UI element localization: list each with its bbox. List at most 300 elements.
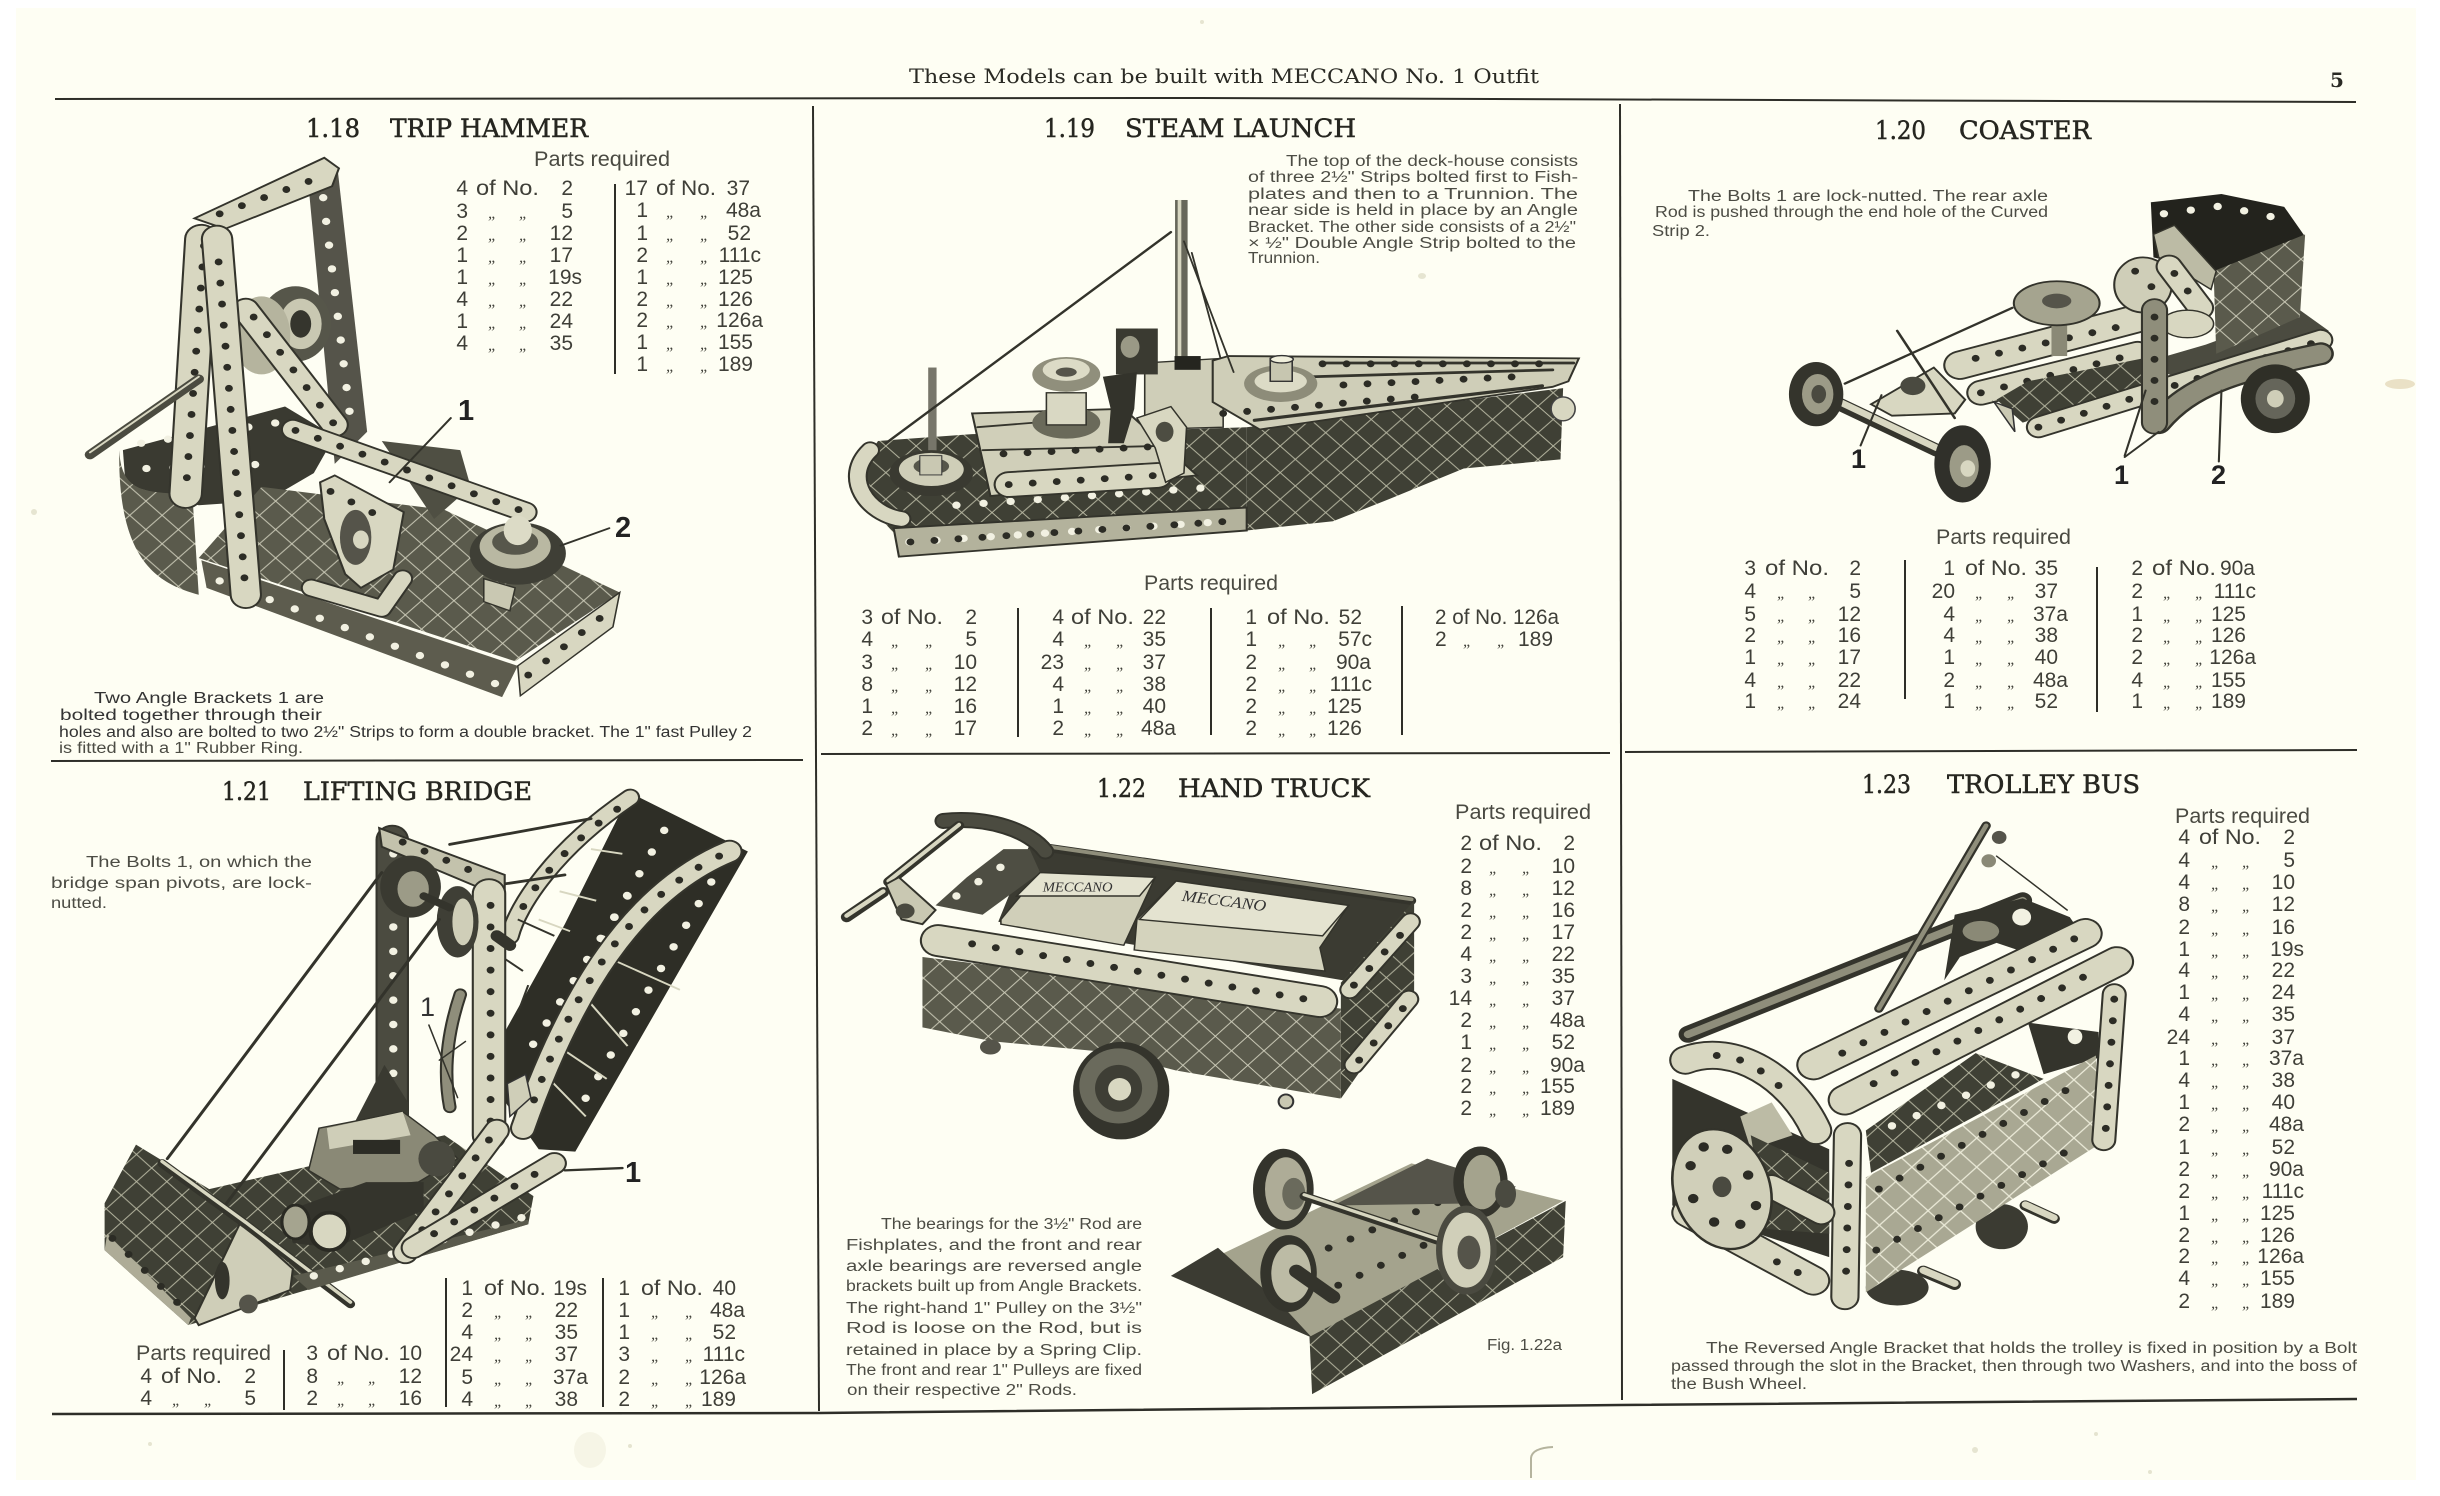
heading: 1.23 Trolley Bus: TROLLEY BUS [1947,770,2140,799]
parts table: 2 [2178,916,2190,939]
parts table: 126a [2209,646,2256,669]
parts table: „„ [1777,651,1817,668]
parts table: 8 [306,1365,318,1388]
parts table: 8 [2178,893,2190,916]
parts table: 5 [1744,603,1756,626]
parts table: 38 [555,1388,578,1411]
parts table: of No. [1965,557,2027,580]
parts table: 189 [1540,1097,1575,1120]
description: plates and then to a Trunnion. The [1248,186,1578,203]
parts table: 22 [2272,959,2295,982]
parts table: 3 [618,1343,630,1366]
parts table: 48a [2033,669,2068,692]
parts table: „„ [337,1370,377,1387]
parts table: 52 [728,222,751,245]
parts table: 17 [550,244,573,267]
description: bridge span pivots, are lock- [51,875,312,892]
parts table: 40 [1143,695,1166,718]
description: The front and rear 1" Pulleys are fixed [846,1362,1142,1379]
parts table: 111c [719,244,761,267]
parts table: 12 [550,222,573,245]
description: × ½" Double Angle Strip bolted to the [1248,235,1576,252]
parts table: 2 [1460,1054,1472,1077]
parts table: 2 [2178,1290,2190,1313]
parts table: of No. [2152,557,2216,580]
parts table: „„ [1777,629,1817,646]
heading: 1.23 Trolley Bus [1862,770,2140,799]
parts table: 4 [140,1365,152,1388]
parts table: 3 [861,606,873,629]
parts table: 24 [550,310,573,333]
heading: 1.21 Lifting Bridge: LIFTING BRIDGE [303,777,532,806]
parts table: 1 [1943,646,1955,669]
parts table: of No. [1479,832,1542,855]
parts table: 2 [636,244,648,267]
parts table: 3 [306,1342,318,1365]
parts table: „„ [488,293,528,310]
parts table: „„ [1489,1014,1531,1031]
parts table: 48a [726,199,761,222]
parts table: 12 [2272,893,2295,916]
parts table: 17 [1552,921,1575,944]
parts table [1449,832,1585,1120]
parts table: „„ [2211,1052,2251,1069]
heading: 1.23 Trolley Bus: 1.23 [1862,770,1911,799]
parts table: 4 [456,177,468,200]
parts heading: Parts required [1936,526,2071,549]
parts table: „„ [494,1393,534,1410]
parts table: 2 [1460,1097,1472,1120]
panel: 1.21 Lifting Bridge [51,777,748,1411]
caption: is fitted with a 1" Rubber Ring. [59,740,303,757]
parts table: 2 [1460,1075,1472,1098]
parts table: 40 [713,1277,736,1300]
parts table: 35 [550,332,573,355]
parts table: 38 [2035,624,2058,647]
parts table [140,1277,746,1411]
caption [1671,1340,2358,1393]
parts table: 1 [618,1321,630,1344]
description: of three 2½" Strips bolted first to Fish- [1248,169,1578,186]
description: Bracket. The other side consists of a 2½" [1248,219,1576,236]
callout numbers: 2 [2211,460,2226,490]
parts table: 16 [2272,916,2295,939]
description: The Bolts 1, on which the [86,854,312,871]
parts table: 2 [2178,1158,2190,1181]
parts table: „„ [1084,656,1125,673]
parts table: of No. [476,177,539,200]
parts table: 1 [636,222,648,245]
parts table: 4 [2178,1267,2190,1290]
parts table: 4 [1943,603,1955,626]
parts table: 24 [450,1343,473,1366]
parts table: 2 [1460,1009,1472,1032]
parts table: 37a [2269,1047,2304,1070]
parts table: 22 [1552,943,1575,966]
description: Rod is loose on the Rod, but is [846,1320,1142,1337]
parts table: 48a [1141,717,1176,740]
parts table: 90a [1336,651,1371,674]
parts table: 2 [2178,1245,2190,1268]
parts table: 2 [461,1299,473,1322]
parts table: „„ [494,1371,534,1388]
parts table: 4 [2178,959,2190,982]
parts table: 1 [2178,981,2190,1004]
parts table: „„ [2211,1207,2251,1224]
parts table: „„ [488,205,528,222]
parts table: „„ [1463,633,1506,650]
parts table: „„ [494,1348,534,1365]
parts table: 189 [1518,628,1553,651]
parts table: 17 [1838,646,1861,669]
parts table: „„ [666,336,709,353]
parts table: „„ [891,722,934,739]
parts table: „„ [2163,629,2204,646]
parts table: „„ [1489,948,1531,965]
panel: 1.18 Trip Hammer [59,114,763,757]
parts table: „„ [2211,1008,2251,1025]
caption [59,690,752,757]
parts table: „„ [1489,860,1531,877]
parts table: 8 [861,673,873,696]
parts table: 2 [2131,557,2143,580]
description: Rod is pushed through the end hole of the Curved [1655,204,2048,221]
parts table: 12 [1552,877,1575,900]
parts table: 4 [2178,849,2190,872]
callout numbers [420,992,641,1189]
parts table: 2 [965,606,977,629]
parts table: 35 [555,1321,578,1344]
callout numbers: 1 [625,1157,641,1189]
parts table: 37 [2272,1026,2295,1049]
heading: 1.20 Coaster: COASTER [1959,116,2092,145]
description: The Bolts 1 are lock-nutted. The rear axle [1688,188,2048,205]
parts table: of No. [641,1277,703,1300]
parts table: 19s [2270,938,2304,961]
parts table: 35 [2272,1003,2295,1026]
parts table: „„ [1489,904,1531,921]
parts table: 22 [1838,669,1861,692]
heading: 1.20 Coaster: 1.20 [1875,116,1926,145]
parts table: „„ [891,656,934,673]
parts table: 2 [618,1366,630,1389]
parts table: 2 [456,222,468,245]
parts table: „„ [2211,1185,2251,1202]
parts table: 5 [561,200,573,223]
parts table: „„ [2163,695,2204,712]
illustration: hand truck model: MECCANO [1042,881,1113,895]
parts table: „„ [1975,629,2016,646]
icon: figure [1103,329,1158,443]
parts table: 52 [1552,1031,1575,1054]
parts table: „„ [1084,700,1125,717]
parts table: „„ [172,1392,213,1409]
parts table: „„ [891,700,934,717]
parts table: „„ [488,271,528,288]
callout numbers: 1 [1851,444,1866,474]
parts table: 4 [861,628,873,651]
parts table: 10 [2272,871,2295,894]
parts table: 1 [636,331,648,354]
parts table: 1 [2131,603,2143,626]
heading: 1.20 Coaster [1875,116,2092,145]
parts table: 5 [2283,849,2295,872]
parts table: „„ [1084,722,1125,739]
heading: 1.22 Hand Truck [1097,774,1371,803]
parts table [1744,557,2256,713]
parts table: „„ [1489,1059,1531,1076]
parts table: 35 [2035,557,2058,580]
parts table: 4 [461,1388,473,1411]
parts table: 2 [1245,717,1257,740]
figure label: Fig. 1.22a [1487,1337,1562,1354]
parts table: 52 [2272,1136,2295,1159]
parts table: 4 [140,1387,152,1410]
illustration: lifting bridge model [105,793,748,1325]
parts table: „„ [1084,633,1125,650]
parts table: 37 [555,1343,578,1366]
parts table: 2 [1245,695,1257,718]
parts table: 8 [1460,877,1472,900]
parts table: 16 [954,695,977,718]
parts table: 3 [456,200,468,223]
parts table: „„ [1975,585,2016,602]
callout numbers: 1 [458,395,474,427]
parts table: „„ [1975,651,2016,668]
parts table: 1 [456,310,468,333]
parts table: 5 [965,628,977,651]
parts table: 1 [2131,690,2143,713]
parts table: 37 [1143,651,1166,674]
parts table: 2 [561,177,573,200]
parts table: 126 [718,288,753,311]
parts table: 111c [1330,673,1372,696]
parts table: 2 [1460,855,1472,878]
parts table: 1 [1744,646,1756,669]
parts table: of No. [484,1277,546,1300]
callout numbers [458,395,631,544]
parts table: 48a [710,1299,745,1322]
page header: These Models can be built with MECCANO No. 1 Outfit [909,64,1539,88]
parts table: „„ [1489,1080,1531,1097]
parts table: 4 [2178,1003,2190,1026]
parts table: 1 [1943,557,1955,580]
heading: 1.22 Hand Truck: HAND TRUCK [1178,774,1371,803]
parts table [2167,826,2304,1313]
parts table: 35 [1552,965,1575,988]
parts table: „„ [666,204,709,221]
parts table: of No. [1267,606,1330,629]
parts table: 90a [2269,1158,2304,1181]
parts table: „„ [2211,921,2251,938]
parts table: „„ [1278,678,1318,695]
parts table: of No. [1071,606,1134,629]
parts table: 125 [2211,603,2246,626]
parts table: 125 [1327,695,1362,718]
parts table: 37 [1552,987,1575,1010]
parts table: 2 [861,717,873,740]
parts table: 24 [1838,690,1861,713]
parts table: 155 [2211,669,2246,692]
parts table: 22 [555,1299,578,1322]
parts table: 37 [2035,580,2058,603]
parts table: 2 [1435,628,1447,651]
parts table: 2 [618,1388,630,1411]
description: Trunnion. [1248,250,1320,267]
parts table: 1 [618,1299,630,1322]
parts table: 4 [461,1321,473,1344]
heading: 1.18 Trip Hammer: TRIP HAMMER [390,114,589,143]
parts table: 52 [1339,606,1362,629]
illustration: steam launch model [849,200,1579,557]
parts table: „„ [1278,633,1318,650]
parts table: 2 [1943,669,1955,692]
parts table: 111c [703,1343,745,1366]
parts table: 4 [1052,673,1064,696]
parts table: 90a [1550,1054,1585,1077]
parts table: „„ [2163,674,2204,691]
description [846,1216,1142,1399]
parts table: 2 [2131,580,2143,603]
parts table: „„ [1975,608,2016,625]
parts table: „„ [2211,1295,2251,1312]
parts table: „„ [651,1348,694,1365]
parts table: „„ [1777,585,1817,602]
parts table: „„ [1975,695,2016,712]
parts table: „„ [2211,1272,2251,1289]
parts table: „„ [488,249,528,266]
parts table: „„ [1489,926,1531,943]
parts table: 1 [2178,1136,2190,1159]
parts table: 12 [1838,603,1861,626]
parts table: 2 [2178,1113,2190,1136]
parts table: 2 [1052,717,1064,740]
parts table: „„ [2163,651,2204,668]
description: Strip 2. [1652,223,1710,240]
parts table: „„ [666,314,709,331]
parts table: 16 [1838,624,1861,647]
parts heading: Parts required [1455,801,1591,824]
description: nutted. [51,895,107,912]
parts table: 52 [713,1321,736,1344]
parts table: of No. [327,1342,390,1365]
parts table: „„ [2211,1118,2251,1135]
parts table: 12 [954,673,977,696]
callout numbers: 1 [420,992,435,1022]
parts table: 1 [2178,938,2190,961]
parts table: 1 [2178,1202,2190,1225]
parts table: „„ [1975,674,2016,691]
parts table: 40 [2272,1091,2295,1114]
parts heading: Parts required [534,148,670,171]
parts table [861,606,1559,740]
parts table: 126a [2257,1245,2304,1268]
callout numbers: 1 [2114,460,2129,490]
parts table: „„ [337,1392,377,1409]
parts table: 1 [636,199,648,222]
parts table: 2 [1849,557,1861,580]
parts table: „„ [666,358,709,375]
parts table: „„ [1489,882,1531,899]
parts table: „„ [488,337,528,354]
parts table: 2 [244,1365,256,1388]
parts table: „„ [891,678,934,695]
parts table: 1 [636,353,648,376]
parts table: „„ [1278,722,1318,739]
parts table: 14 [1449,987,1472,1010]
parts table: 37a [2033,603,2068,626]
description: Fishplates, and the front and rear [846,1237,1142,1254]
description: The bearings for the 3½" Rod are [881,1216,1142,1233]
parts table: 2 [1245,651,1257,674]
parts table: 22 [550,288,573,311]
parts table: 17 [954,717,977,740]
parts table: 1 [618,1277,630,1300]
parts table: 2 [1460,832,1472,855]
parts table: 19s [548,266,582,289]
parts table: „„ [651,1326,694,1343]
parts table: 57c [1338,628,1372,651]
parts table: 1 [1744,690,1756,713]
illustration: trip hammer model [90,158,620,697]
parts table: „„ [1489,1102,1531,1119]
caption: passed through the slot in the Bracket, then through two Washers, and into the boss of [1671,1358,2358,1375]
parts table: 10 [399,1342,422,1365]
parts table: 2 [1563,832,1575,855]
heading: 1.22 Hand Truck: 1.22 [1097,774,1146,803]
parts table: 1 [636,266,648,289]
parts table: 1 [456,266,468,289]
caption: The Reversed Angle Bracket that holds the trolley is fixed in position by a Bolt [1706,1340,2358,1357]
parts table: „„ [1278,656,1318,673]
parts table: „„ [2211,964,2251,981]
parts table: 189 [718,353,753,376]
parts table: „„ [651,1371,694,1388]
parts table: „„ [488,315,528,332]
parts table: 2 [1744,624,1756,647]
parts table: 38 [1143,673,1166,696]
parts table: 4 [1052,628,1064,651]
parts table: „„ [2211,1096,2251,1113]
parts table: 48a [1550,1009,1585,1032]
parts table: 37 [727,177,750,200]
description: axle bearings are reversed angle [846,1258,1142,1275]
parts table: „„ [1489,992,1531,1009]
parts table: 189 [2260,1290,2295,1313]
parts table: 1 [2178,1091,2190,1114]
caption: bolted together through their [60,707,322,724]
parts table: 1 [2178,1047,2190,1070]
description: near side is held in place by an Angle [1248,202,1578,219]
heading: 1.19 Steam Launch: 1.19 [1044,114,1095,143]
parts table: 4 [2178,871,2190,894]
parts table: of No. [881,606,943,629]
callout numbers [1851,444,2226,490]
description [1652,188,2048,240]
parts table: 126 [2211,624,2246,647]
parts table: „„ [2211,1229,2251,1246]
parts table: „„ [488,227,528,244]
parts table: 4 [1943,624,1955,647]
heading: 1.19 Steam Launch: STEAM LAUNCH [1125,114,1356,143]
parts table: „„ [2211,876,2251,893]
parts table: „„ [2211,1031,2251,1048]
parts table: „„ [651,1304,694,1321]
parts table: 2 [2131,646,2143,669]
parts table: 2 [306,1387,318,1410]
parts table: 2 [636,288,648,311]
parts table: 48a [2269,1113,2304,1136]
